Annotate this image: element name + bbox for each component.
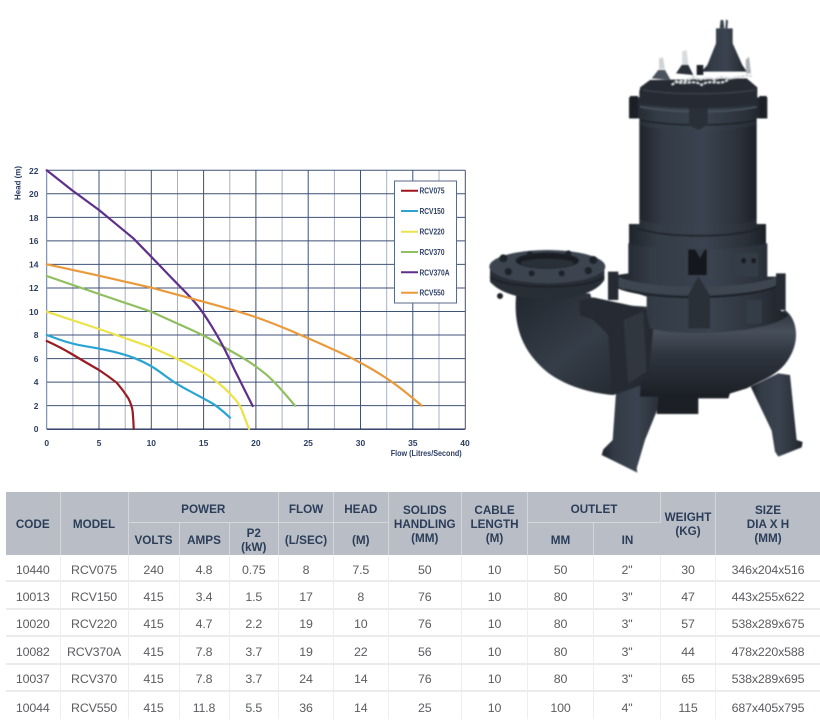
specification table: 50 (418, 563, 432, 577)
specification table: 3.4 (196, 590, 212, 604)
specification table: 4" (622, 701, 633, 715)
x axis labels: 30 (356, 438, 365, 448)
y axis labels: 16 (29, 236, 39, 246)
y axis labels: 2 (34, 401, 39, 411)
specification table: 8 (303, 563, 309, 577)
specification table: 4.7 (196, 617, 212, 631)
chain (672, 75, 752, 85)
specification table: 76 (418, 617, 432, 631)
specification table: CODE (16, 518, 50, 531)
specification table: 3" (622, 617, 633, 631)
curve: RCV550 (47, 264, 422, 406)
specification table: 10082 (16, 645, 50, 659)
specification table: 346x204x516 (732, 563, 804, 577)
x axis labels: 10 (147, 438, 156, 448)
specification table (6, 492, 820, 719)
specification table: 443x255x622 (732, 590, 804, 604)
specification table: 11.8 (193, 701, 215, 715)
y axis labels: 0 (34, 424, 39, 434)
specification table: 415 (143, 590, 164, 604)
specification table: 25 (418, 701, 432, 715)
specification table: 80 (554, 617, 567, 631)
specification table: 3" (622, 645, 633, 659)
specification table: RCV150 (71, 590, 117, 604)
curves (47, 170, 422, 429)
specification table: 5.5 (245, 701, 262, 715)
specification table: 10 (354, 617, 368, 631)
y axis labels: 22 (29, 166, 39, 176)
y axis title: Head (m) (14, 166, 22, 200)
x axis labels (44, 438, 470, 448)
specification table: 10037 (16, 672, 50, 686)
specification table: 100 (550, 701, 571, 715)
specification table: 415 (143, 701, 164, 715)
specification table: 19 (299, 617, 313, 631)
joint flange (579, 297, 654, 393)
specification table: 36 (299, 701, 313, 715)
specification table: 76 (418, 672, 432, 686)
x axis labels: 0 (44, 438, 49, 448)
y axis labels: 10 (29, 307, 39, 317)
upper collar (629, 90, 767, 131)
specification table: RCV550 (71, 701, 117, 715)
specification table: 415 (143, 617, 164, 631)
chart grid (47, 170, 465, 429)
specification table: 7.5 (352, 563, 369, 577)
specification table: RCV370 (71, 672, 117, 686)
specification table: 1.5 (245, 590, 262, 604)
specification table: 56 (418, 645, 432, 659)
specification table: VOLTS (134, 534, 173, 547)
curve: RCV370 (47, 276, 295, 406)
mid collar (629, 220, 766, 250)
specification table: 80 (554, 645, 567, 659)
x axis labels: 35 (408, 438, 418, 448)
discharge elbow (516, 293, 647, 395)
specification table: HEAD (344, 503, 377, 516)
specification table: 415 (143, 645, 164, 659)
specification table: 10440 (16, 563, 50, 577)
specification table: (M) (352, 534, 370, 547)
specification table: HANDLING (394, 518, 456, 531)
pump legs (602, 373, 803, 473)
specification table: POWER (181, 503, 225, 516)
y axis labels: 14 (29, 260, 39, 270)
specification table: 8 (357, 590, 364, 604)
legend: RCV220 (420, 228, 445, 237)
legend: RCV370 (420, 248, 445, 257)
specification table: 17 (299, 590, 313, 604)
specification table: (M) (486, 532, 503, 545)
x axis labels: 15 (199, 438, 209, 448)
specification table: (kW) (241, 541, 266, 554)
specification table: (KG) (675, 525, 701, 538)
specification table: 44 (681, 645, 695, 659)
specification table: MODEL (73, 518, 115, 531)
y axis labels: 12 (29, 283, 39, 293)
specification table: DIA X H (747, 518, 789, 531)
legend (394, 181, 456, 303)
lower stator housing (617, 243, 788, 333)
specification table: P2 (247, 527, 261, 540)
specification table: 687x405x795 (732, 701, 804, 715)
legend: RCV370A (420, 268, 450, 277)
specification table: 80 (554, 672, 567, 686)
x axis title: Flow (Litres/Second) (391, 448, 462, 458)
specification table: 3" (622, 672, 633, 686)
specification table: 80 (554, 590, 567, 604)
volute casing (640, 310, 796, 397)
specification table: 10 (488, 645, 501, 659)
specification table: 3" (622, 590, 633, 604)
specification table: 10044 (16, 701, 50, 715)
specification table: (L/SEC) (285, 534, 327, 547)
specification table: LENGTH (470, 518, 519, 531)
specification table: 30 (681, 563, 695, 577)
y axis labels: 8 (34, 330, 39, 340)
specification table: 10020 (16, 617, 50, 631)
specification table: 115 (678, 701, 698, 715)
curve: RCV220 (47, 312, 249, 429)
curve: RCV150 (47, 335, 230, 418)
specification table: 14 (354, 672, 368, 686)
specification table: 10 (488, 672, 501, 686)
specification table: 538x289x695 (732, 672, 804, 686)
specification table: 240 (143, 563, 164, 577)
y axis labels: 18 (29, 213, 39, 223)
specification table: MM (551, 534, 570, 547)
specification table: OUTLET (571, 503, 617, 516)
specification table: 4.8 (196, 563, 212, 577)
top plate (640, 78, 757, 108)
specification table: SIZE (755, 504, 781, 517)
specification table: 3.7 (245, 672, 262, 686)
specification table: 22 (354, 645, 368, 659)
specification table: SOLIDS (403, 504, 447, 517)
specification table: FLOW (289, 503, 323, 516)
specification table: 538x289x675 (732, 617, 804, 631)
specification table: CABLE (474, 504, 515, 517)
cable gland cone (697, 19, 747, 75)
y axis labels: 20 (29, 189, 39, 199)
specification table: (MM) (754, 532, 782, 545)
specification table: 10 (488, 590, 501, 604)
x axis labels: 40 (460, 438, 470, 448)
x axis labels: 5 (97, 438, 102, 448)
curve: RCV370A (47, 170, 253, 406)
specification table: 19 (299, 645, 313, 659)
specification table: (MM) (411, 532, 438, 545)
legend: RCV550 (420, 289, 445, 298)
motor body (639, 123, 757, 226)
specification table: 10 (488, 701, 501, 715)
specification table: 65 (681, 672, 695, 686)
specification table: IN (622, 534, 633, 547)
specification table: 7.8 (196, 672, 212, 686)
flange ring and ribs (608, 230, 786, 328)
specification table: 57 (681, 617, 695, 631)
curve: RCV075 (47, 341, 134, 429)
y axis labels: 4 (34, 377, 39, 387)
specification table: 478x220x588 (732, 645, 804, 659)
specification table: 14 (354, 701, 368, 715)
specification table: 3.7 (245, 645, 262, 659)
legend: RCV075 (420, 187, 445, 196)
lifting lugs (652, 50, 751, 80)
x axis labels: 20 (251, 438, 261, 448)
specification table: 415 (143, 672, 164, 686)
legend: RCV150 (420, 207, 445, 216)
specification table: 7.8 (196, 645, 212, 659)
x axis labels: 25 (303, 438, 313, 448)
y axis labels (29, 166, 39, 434)
specification table: 47 (681, 590, 695, 604)
specification table: 24 (299, 672, 313, 686)
specification table: AMPS (187, 534, 221, 547)
specification table: RCV220 (71, 617, 117, 631)
specification table: WEIGHT (665, 511, 711, 524)
specification table: 76 (418, 590, 432, 604)
specification table: RCV370A (67, 645, 121, 659)
specification table: RCV075 (71, 563, 117, 577)
y axis labels: 6 (34, 354, 39, 364)
specification table: 50 (554, 563, 567, 577)
specification table: 2.2 (245, 617, 262, 631)
specification table: 10 (488, 617, 501, 631)
specification table: 10013 (16, 590, 50, 604)
specification table: 10 (488, 563, 501, 577)
specification table: 2" (622, 563, 633, 577)
specification table: 0.75 (242, 563, 266, 577)
discharge flange (489, 250, 605, 299)
